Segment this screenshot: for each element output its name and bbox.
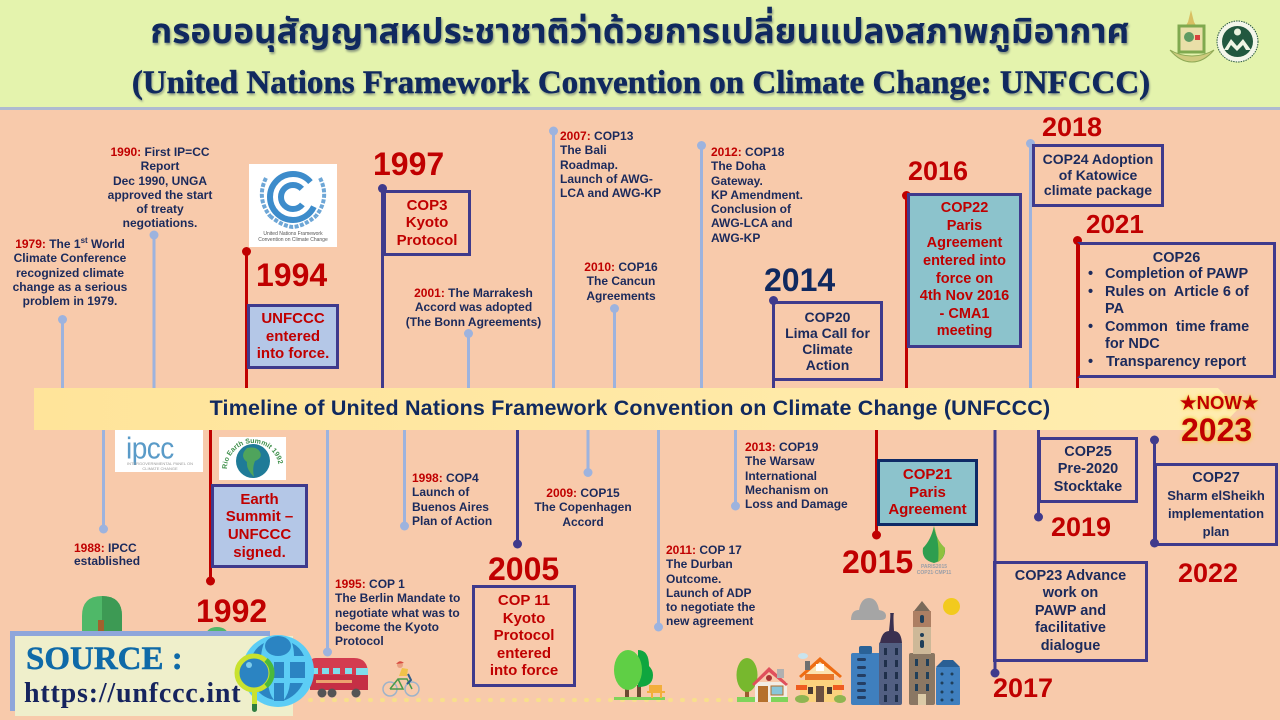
note: 2007: Launch of AWG- — [560, 172, 653, 186]
stem: 1979 — [58, 315, 67, 392]
box: Earth Summit: Earth — [240, 491, 279, 508]
note: 1990: Report — [141, 159, 179, 173]
stem: 2018 — [1026, 139, 1035, 392]
box: COP23: dialogue — [1041, 638, 1100, 654]
year 2021: 2021 — [1086, 209, 1144, 239]
logo: UNFCCC — [249, 164, 337, 247]
icon: globe with magnifier — [234, 635, 314, 712]
note: 2007 — [560, 129, 661, 200]
note: 2013: 2013: COP19 — [745, 440, 818, 454]
leaf — [922, 526, 946, 563]
box: COP24: of Katowice — [1059, 167, 1137, 183]
note: 2010: The Cancun — [587, 274, 655, 288]
box: COP22: 4th Nov 2016 — [920, 288, 1009, 304]
note: 2009: 2009: COP15 — [546, 486, 620, 500]
box: COP26: for NDC — [1105, 336, 1160, 352]
caption: PARIS2015 — [921, 564, 947, 570]
now marker: ★NOW★ — [1180, 392, 1258, 413]
year 2015: 2015 — [842, 544, 913, 580]
logo: IPCC — [115, 430, 203, 472]
source panel inner — [15, 636, 293, 716]
note: 2010 — [584, 260, 658, 303]
box: COP21: Paris — [909, 484, 946, 501]
note: 1990: 1990: First IP=CC — [110, 145, 210, 159]
icon: department seal — [1216, 20, 1258, 62]
box: COP27: plan — [1203, 524, 1229, 538]
box: COP22: COP22 — [941, 200, 988, 216]
note: 2012 — [711, 145, 803, 245]
box: COP23: work on — [1043, 585, 1098, 601]
note: 2001: 2001: The Marrakesh — [414, 286, 533, 300]
COP26 bullets — [1088, 266, 1249, 370]
box: UNFCCC entered into force: UNFCCC — [261, 310, 325, 327]
stem: 2016 — [902, 191, 911, 392]
note: 2011: to negotiate the — [666, 600, 755, 614]
box: COP20: Lima Call for — [785, 325, 870, 341]
box: COP23: facilitative — [1035, 620, 1106, 636]
box: COP20: COP20 — [805, 309, 850, 325]
note: 1990: approved the start — [108, 188, 212, 202]
box: COP25: Stocktake — [1054, 479, 1122, 495]
box: COP23: PAWP and — [1035, 603, 1106, 619]
box: COP3: Protocol — [397, 232, 457, 249]
note: 2013: The Warsaw — [745, 454, 815, 468]
note: 2009: The Copenhagen — [534, 500, 632, 514]
note: 2012: 2012: COP18 — [711, 145, 784, 159]
note: 1990: of treaty — [136, 202, 184, 216]
box: COP26: Rules on Article 6 of — [1105, 284, 1249, 300]
year 2023: 2023 — [1181, 412, 1252, 448]
year 2017: 2017 — [993, 673, 1053, 703]
COP26 heading: COP26 — [1153, 250, 1200, 266]
box: COP22: meeting — [937, 323, 992, 339]
COP26 bullets: • — [1088, 354, 1093, 370]
box: COP11: Protocol — [494, 627, 554, 644]
box: COP27: Sharm elSheikh — [1167, 488, 1265, 502]
stem: 1990 — [150, 230, 158, 392]
note: 2001 — [406, 286, 541, 329]
note: 1995: Protocol — [335, 634, 384, 648]
year 1994: 1994 — [256, 257, 327, 293]
note: 1998: 1998: COP4 — [412, 471, 479, 485]
box: COP21 — [877, 459, 978, 526]
stem: 2011 — [654, 426, 663, 632]
box: COP22: entered into — [923, 253, 1006, 269]
icon: sun — [943, 598, 960, 615]
year 2019: 2019 — [1051, 512, 1111, 542]
source panel — [10, 631, 270, 711]
timeline band arrow — [34, 388, 1238, 430]
note: 1979: change as a serious — [13, 280, 127, 294]
stem: 2010 — [610, 304, 619, 392]
note: 2001: (The Bonn Agreements) — [406, 315, 541, 329]
year 2018: 2018 — [1042, 112, 1102, 142]
note: 1995: The Berlin Mandate to — [335, 591, 460, 605]
note: 1988: 1988: IPCC — [74, 541, 137, 555]
dotted road — [310, 698, 740, 702]
logo: Rio Earth Summit — [219, 437, 286, 480]
stem: 1995 — [323, 426, 332, 656]
box: COP26: Transparency report — [1106, 354, 1246, 370]
icon: house with tree — [736, 658, 788, 702]
box: COP22: Paris — [947, 218, 982, 234]
stem: 2019 — [1034, 426, 1043, 522]
note: 1998: Launch of — [412, 485, 469, 499]
icon: tree small — [205, 627, 229, 640]
stem: 2012 — [697, 141, 706, 392]
stem: 2001 — [464, 329, 473, 392]
icon: orange house — [795, 653, 846, 703]
box: COP11: into force — [490, 662, 558, 679]
year 1997: 1997 — [373, 146, 444, 182]
note: 2011: new agreement — [666, 614, 753, 628]
stem: 1998 — [400, 426, 409, 530]
box: COP11: COP 11 — [498, 592, 550, 609]
stem: 2015 — [872, 426, 881, 540]
stem: 2017 — [990, 426, 1000, 678]
icon: park trees and bench — [614, 650, 665, 700]
emblem — [260, 171, 326, 229]
box: COP20: Action — [806, 357, 849, 373]
box: COP26: Common time frame — [1105, 319, 1249, 335]
box: COP3: Kyoto — [406, 214, 448, 231]
stem: 2013 — [731, 426, 740, 510]
box: COP24 — [1032, 144, 1164, 207]
stem: 1994 — [242, 247, 251, 392]
note: 2007: 2007: COP13 — [560, 129, 633, 143]
ipcc wordmark: ipcc — [126, 431, 174, 465]
box: COP26 — [1077, 242, 1276, 378]
note: 2007: The Bali — [560, 143, 607, 157]
box: COP26: PA — [1105, 301, 1124, 317]
stem: 2021 — [1073, 236, 1082, 392]
stem: 2009 — [584, 426, 592, 477]
box: COP3: COP3 — [407, 197, 447, 214]
note: 2011: The Durban — [666, 557, 733, 571]
caption: CLIMATE CHANGE — [142, 466, 178, 471]
caption — [258, 231, 328, 243]
box: COP24: COP24 Adoption — [1043, 151, 1153, 167]
note: 2013: Mechanism on — [745, 483, 828, 497]
box: UNFCCC entered into force: entered — [266, 328, 320, 345]
logo: Paris leaf — [917, 526, 952, 576]
year 2022: 2022 — [1178, 558, 1238, 588]
note: 2011 — [666, 543, 755, 628]
note: 2001: Accord was adopted — [415, 300, 532, 314]
box: COP25: Pre-2020 — [1058, 461, 1118, 477]
icon: tree left — [82, 596, 122, 640]
stem: 1992 — [206, 426, 215, 586]
stem: 2022 — [1150, 436, 1159, 548]
note: 1979: Climate Conference — [14, 251, 126, 265]
note: 2012: KP Amendment. — [711, 188, 803, 202]
year 1992: 1992 — [196, 593, 267, 629]
globe: Rio Earth Summit 1992 — [222, 438, 283, 469]
box: COP20 — [772, 301, 883, 381]
caption — [127, 461, 193, 471]
note: 1979: problem in 1979. — [23, 294, 117, 308]
note: 1995: 1995: COP 1 — [335, 577, 405, 591]
note: 2013 — [745, 440, 848, 511]
caption: Convention on Climate Change — [258, 237, 328, 243]
note: 1995: negotiate what was to — [335, 606, 460, 620]
stem: 2005 — [513, 426, 522, 548]
box: UNFCCC entered into force: into force. — [257, 345, 329, 362]
caption: COP21·CMP11 — [917, 570, 951, 576]
box: UNFCCC entered into force — [247, 304, 339, 369]
box: COP11: Kyoto — [503, 610, 545, 627]
box: COP24: climate package — [1044, 182, 1152, 198]
year 2005: 2005 — [488, 551, 559, 587]
box: COP11 — [472, 585, 576, 687]
note: 1988 — [74, 541, 140, 568]
stem: 1988 — [99, 426, 108, 534]
note: 1979: 1979: The 1st World — [15, 236, 125, 251]
note: 1988: established — [74, 554, 140, 568]
box: COP23: COP23 Advance — [1015, 568, 1126, 584]
title: Thai: กรอบอนุสัญญาสหประชาชาติว่าด้วยการเปลี่ยนแปลงสภาพภูมิอากาศ — [150, 6, 1130, 59]
note: 2013: International — [745, 469, 817, 483]
note: 2007: LCA and AWG-KP — [560, 186, 661, 200]
box: COP21: COP21 — [903, 466, 952, 483]
box: COP22: - CMA1 — [940, 306, 989, 322]
note: 2009: Accord — [562, 515, 604, 529]
box: Earth Summit — [211, 484, 308, 568]
box: COP27: implementation — [1168, 506, 1264, 520]
note: 1979: recognized climate — [16, 266, 124, 280]
year 2014: 2014 — [764, 262, 835, 298]
icon: cloud — [851, 598, 886, 620]
box: COP22: Agreement — [927, 235, 1002, 251]
icon: provincial crest — [1170, 10, 1214, 62]
caption — [917, 564, 952, 576]
COP26 bullets: • — [1088, 284, 1093, 300]
box: Earth Summit: signed. — [233, 544, 286, 561]
box: COP23 — [993, 561, 1148, 662]
box: COP11: entered — [497, 645, 551, 662]
year 2016: 2016 — [908, 156, 968, 186]
box: COP27 — [1154, 463, 1278, 546]
note: 1990: negotiations. — [123, 216, 197, 230]
box: Earth Summit: Summit – — [226, 508, 293, 525]
note: 2011: Launch of ADP — [666, 586, 752, 600]
COP26 bullets: • — [1088, 266, 1093, 282]
source url: https://unfccc.int — [24, 678, 241, 709]
box: COP22: force on — [936, 270, 993, 286]
note: 1995 — [335, 577, 460, 648]
note: 2012: The Doha — [711, 159, 766, 173]
note: 2012: AWG-KP — [711, 231, 760, 245]
box: COP3 — [383, 190, 471, 256]
icon: city buildings — [851, 601, 960, 705]
note: 2007: Roadmap. — [560, 158, 618, 172]
box: Earth Summit: UNFCCC — [228, 526, 291, 543]
note: 2009 — [534, 486, 632, 529]
note: 1998: Plan of Action — [412, 514, 492, 528]
box: COP22 — [907, 193, 1022, 348]
COP26 bullets: • — [1088, 319, 1093, 335]
note: 1998: Buenos Aires — [412, 500, 489, 514]
box: COP26: Completion of PAWP — [1105, 266, 1248, 282]
title: English: (United Nations Framework Convention on Climate Change: UNFCCC) — [132, 65, 1150, 101]
note: 2012: AWG-LCA and — [711, 216, 793, 230]
note: 2012: Conclusion of — [711, 202, 791, 216]
stem: 1997 — [378, 184, 387, 392]
caption: United Nations Framework — [263, 231, 323, 237]
note: 2010: 2010: COP16 — [584, 260, 658, 274]
note: 2013: Loss and Damage — [745, 497, 848, 511]
stem: 2014 — [769, 296, 778, 392]
note: 2011: Outcome. — [666, 572, 721, 586]
note: 1998 — [412, 471, 492, 528]
stem: 2007 — [549, 126, 558, 392]
box: COP27: COP27 — [1192, 470, 1240, 486]
caption: INTERGOVERNMENTAL PANEL ON — [127, 461, 193, 466]
header banner — [0, 0, 1280, 110]
icon: red bus — [310, 658, 368, 698]
note: 1990: Dec 1990, UNGA — [113, 174, 207, 188]
source heading: SOURCE : — [26, 641, 183, 677]
box: COP25: COP25 — [1064, 444, 1112, 460]
box: COP20: Climate — [802, 341, 853, 357]
note: 2012: Gateway. — [711, 174, 763, 188]
band title: Timeline of United Nations Framework Convention on Climate Change (UNFCCC) — [210, 396, 1050, 420]
note: 1990 — [108, 145, 212, 230]
note: 2011: 2011: COP 17 — [666, 543, 742, 557]
note: 1979 — [13, 236, 127, 308]
note: 2010: Agreements — [586, 289, 656, 303]
box: COP25 — [1038, 437, 1138, 503]
note: 1995: become the Kyoto — [335, 620, 439, 634]
box: COP21: Agreement — [888, 501, 967, 518]
icon: cyclist — [383, 661, 419, 696]
